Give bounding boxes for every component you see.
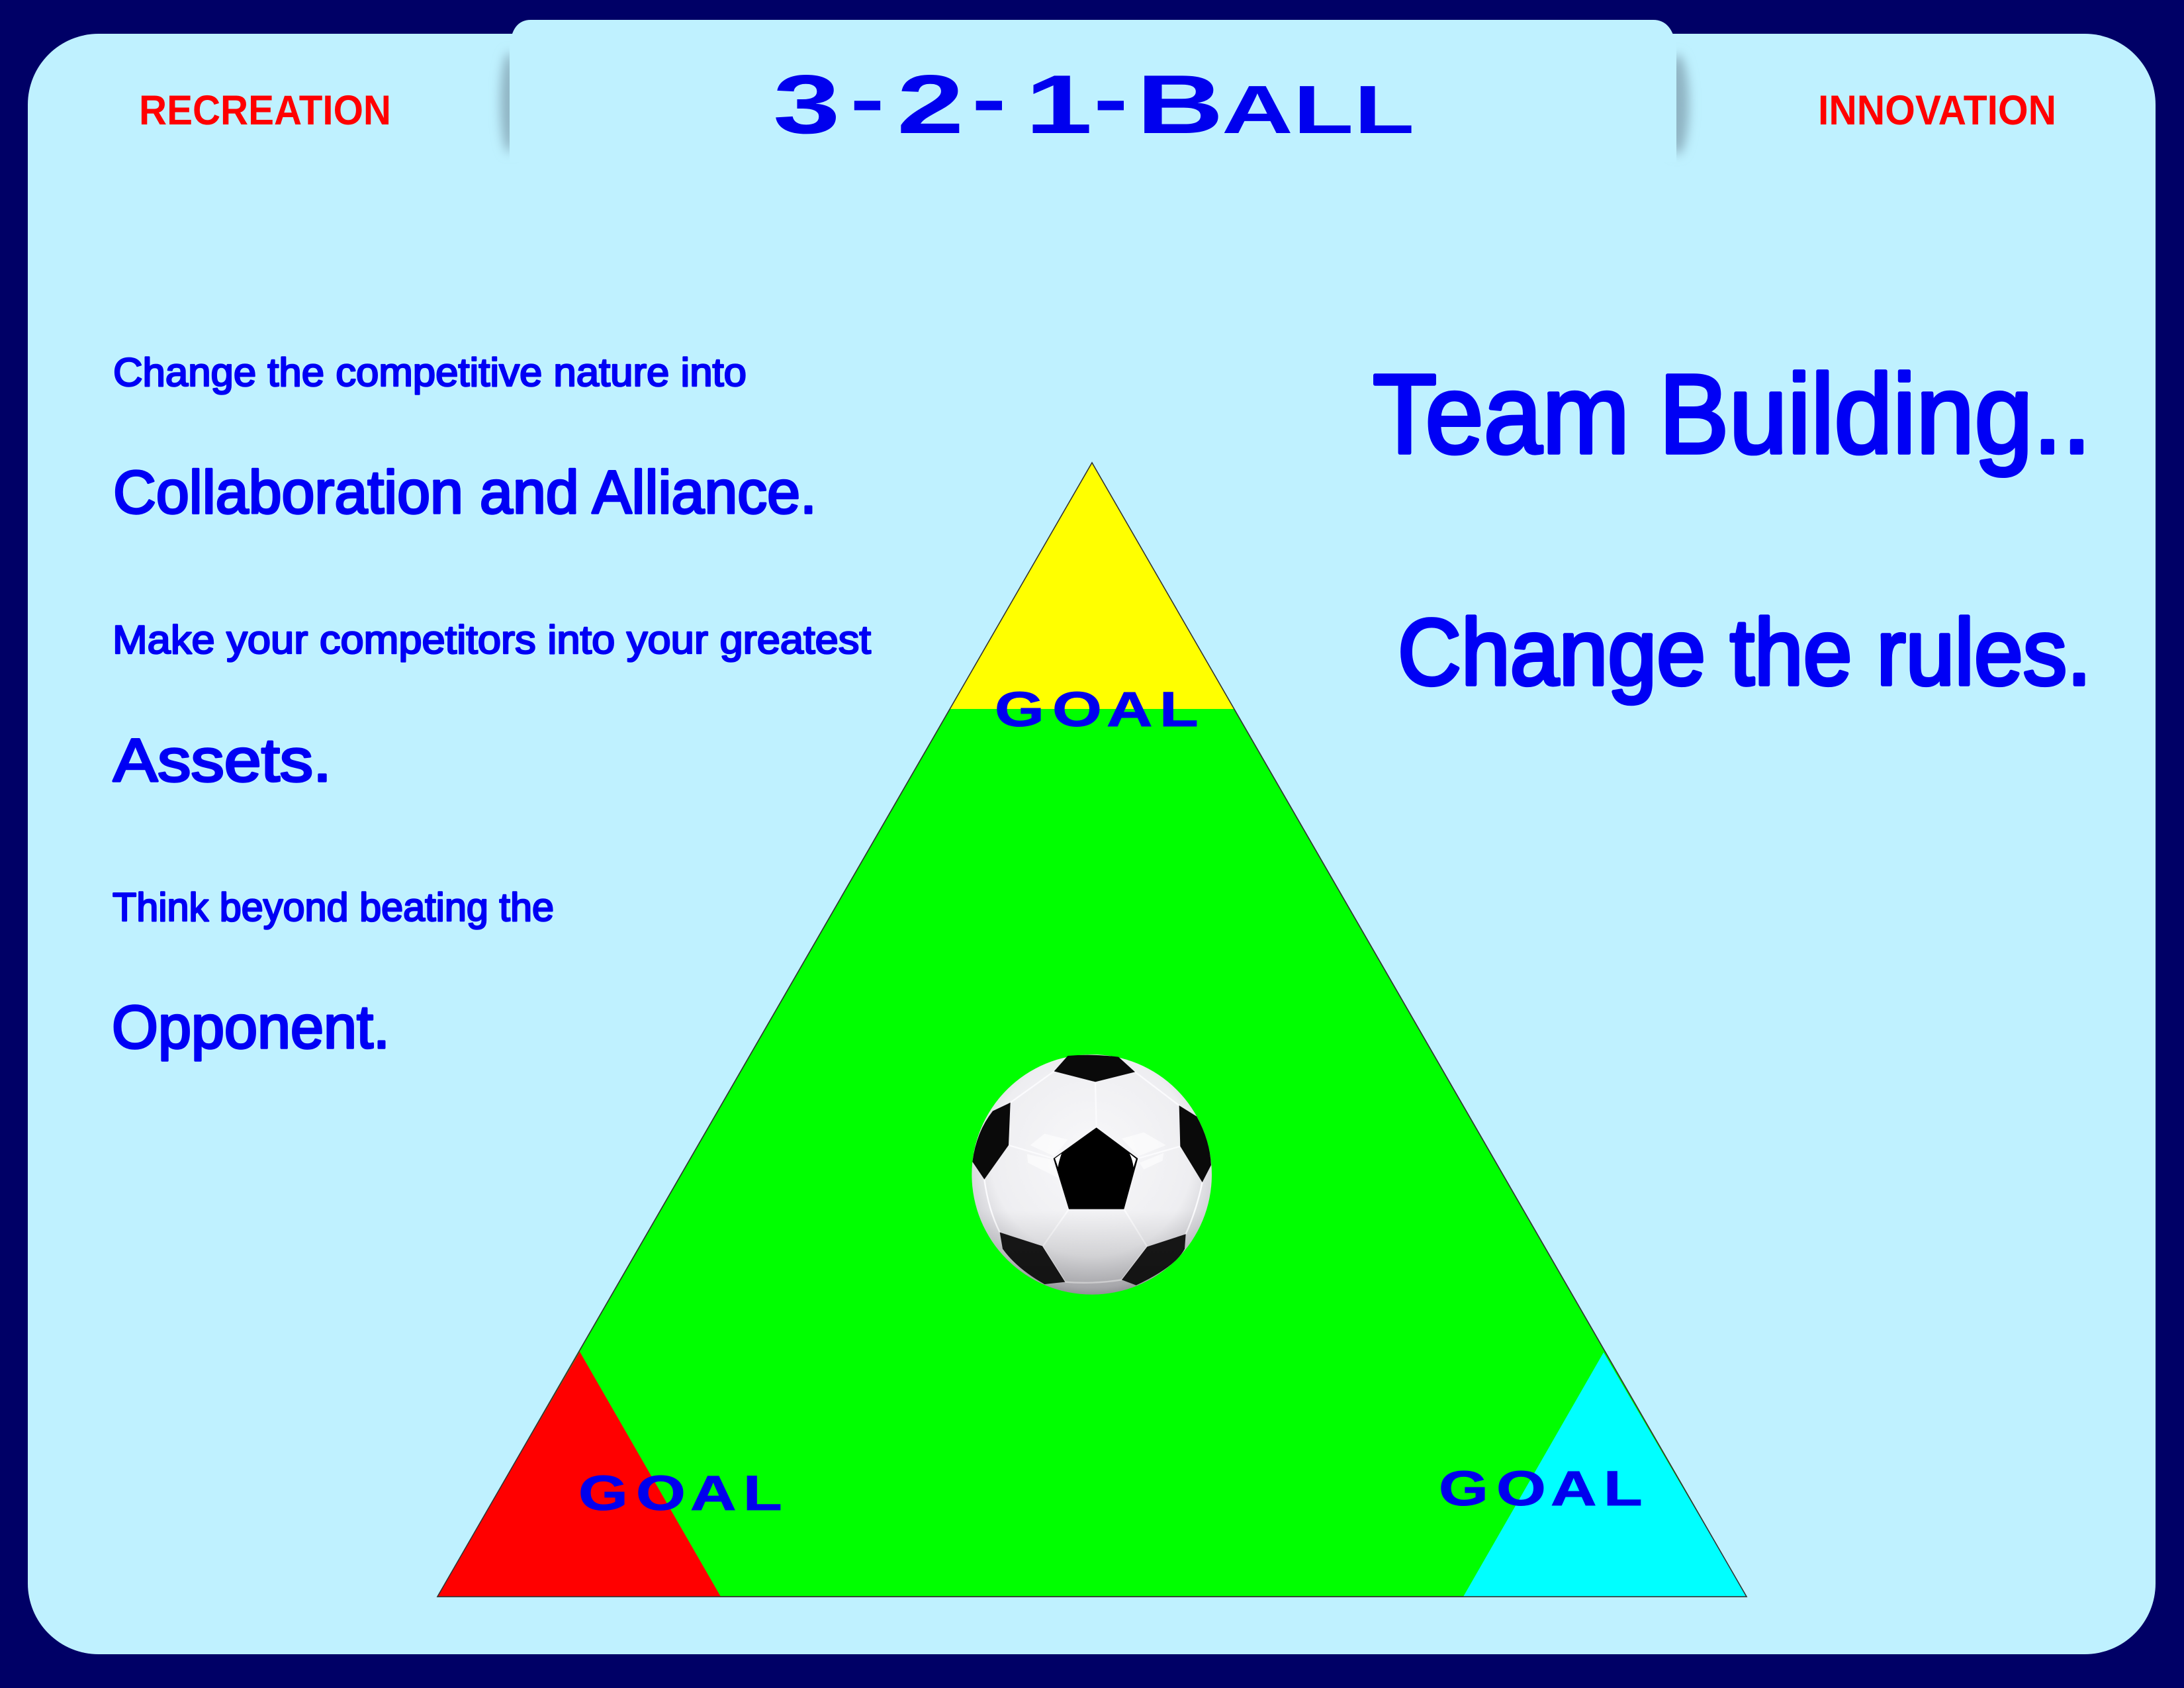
goal label: right: GOAL bbox=[1439, 1462, 1643, 1516]
green field bbox=[437, 463, 1747, 1597]
text: think beyond: Think beyond beating the bbox=[113, 885, 554, 929]
right heading: team building: Team Building.. bbox=[1373, 352, 2091, 477]
text: collaboration and alliance: Collaboration and Alliance. bbox=[113, 459, 817, 526]
text: opponent: Opponent. bbox=[112, 994, 390, 1061]
left text block bbox=[112, 350, 871, 1061]
goal label: left: GOAL bbox=[578, 1466, 782, 1521]
pitch triangle bbox=[437, 463, 1747, 1597]
cyan corner bbox=[1463, 1352, 1747, 1597]
title: 3-2- 1-BALL bbox=[773, 58, 1414, 151]
tab shadow: right bbox=[1665, 54, 1689, 155]
text: change the competitive nature: Change the competitive nature into bbox=[113, 350, 747, 395]
tab shadow: left bbox=[500, 52, 519, 153]
triangle outline bbox=[437, 463, 1747, 1597]
ball black patches bbox=[1054, 1055, 1135, 1082]
label: innovation: INNOVATION bbox=[1818, 87, 2056, 134]
right heading: change the rules: Change the rules. bbox=[1398, 600, 2091, 705]
pentagon slivers bbox=[1055, 1154, 1136, 1167]
ball highlights bbox=[1027, 1133, 1166, 1178]
yellow corner bbox=[950, 463, 1234, 709]
title tab bbox=[510, 20, 1676, 162]
icon: soccer ball bbox=[972, 1055, 1212, 1295]
text: assets: Assets. bbox=[113, 727, 332, 794]
red corner bbox=[437, 1352, 721, 1597]
label: recreation: RECREATION bbox=[139, 87, 391, 134]
ball bottom shading bbox=[972, 1055, 1212, 1295]
text: make your competitors: Make your competitors into your greatest bbox=[113, 618, 871, 662]
goal label: top: GOAL bbox=[995, 682, 1199, 737]
ball seams bbox=[984, 1071, 1203, 1283]
